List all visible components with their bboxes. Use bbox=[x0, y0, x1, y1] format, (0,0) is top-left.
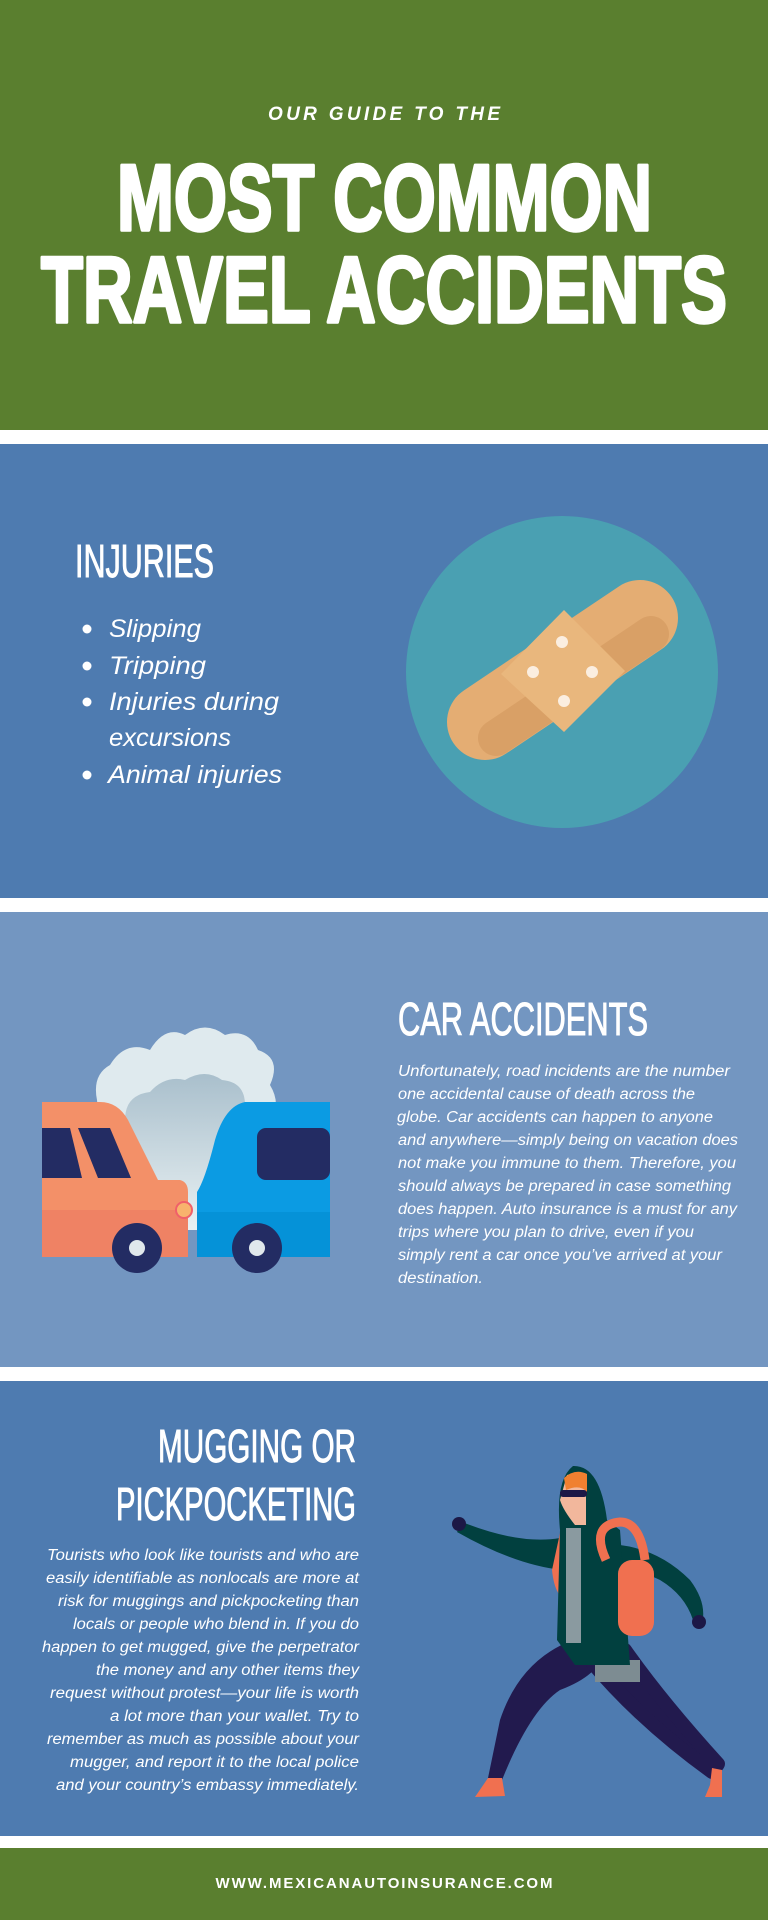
text block: mugging: easily identifiable as nonlocals are more at bbox=[46, 1570, 360, 1587]
heading: injuries: INJURIES bbox=[75, 535, 214, 587]
text block: car accidents: globe. Car accidents can happen to anyone bbox=[397, 1109, 713, 1126]
text block: car accidents: should always be prepared in case something bbox=[398, 1178, 731, 1195]
heading: mugging bbox=[116, 1420, 356, 1530]
text block: car accidents: does happen. Auto insurance is a must for any bbox=[398, 1201, 738, 1218]
text block: mugging: and your country’s embassy immediately. bbox=[56, 1777, 359, 1794]
text block: mugging: risk for muggings and pickpocketing than bbox=[58, 1593, 359, 1610]
text block: mugging: remember as much as possible about your bbox=[47, 1731, 360, 1748]
list: injuries: Injuries during bbox=[109, 688, 279, 716]
heading: mugging: PICKPOCKETING bbox=[116, 1478, 356, 1530]
subtitle: OUR GUIDE TO THE bbox=[268, 104, 501, 125]
text block: car accidents: and anywhere—simply being on vacation does bbox=[398, 1132, 738, 1149]
list: injuries: Tripping bbox=[109, 652, 206, 680]
text block: car accidents: simply rent a car once you’ve arrived at your bbox=[398, 1247, 723, 1264]
list: injuries bbox=[82, 615, 282, 789]
text block: mugging: locals or people who blend in. If you do bbox=[73, 1616, 359, 1633]
text block: car accidents: trips where you plan to drive, even if you bbox=[398, 1224, 694, 1241]
panel: car accidents bbox=[0, 912, 768, 1367]
text block: car accidents: not make you immune to them. Therefore, you bbox=[398, 1155, 736, 1172]
list: injuries: Animal injuries bbox=[106, 761, 282, 789]
text block: mugging: Tourists who look like tourists and who are bbox=[47, 1547, 359, 1564]
icon: car crash bbox=[42, 1028, 330, 1273]
list: injuries: Slipping bbox=[109, 615, 201, 643]
text block: car accidents: one accidental cause of death across the bbox=[398, 1086, 695, 1103]
text block: mugging: request without protest—your life is worth bbox=[50, 1685, 359, 1702]
text block: mugging bbox=[42, 1547, 360, 1794]
text block: mugging: mugger, and report it to the local police bbox=[70, 1754, 359, 1771]
text block: car accidents: destination. bbox=[398, 1270, 483, 1287]
footer bbox=[0, 1848, 768, 1920]
text block: car accidents bbox=[397, 1063, 738, 1287]
footer url: WWW.MEXICANAUTOINSURANCE.COM bbox=[216, 1875, 552, 1892]
icon: bandage bbox=[406, 516, 718, 828]
panel: mugging bbox=[0, 1381, 768, 1836]
text block: mugging: happen to get mugged, give the perpetrator bbox=[42, 1639, 360, 1656]
list: injuries: excursions bbox=[109, 724, 231, 752]
text block: car accidents: Unfortunately, road incidents are the number bbox=[398, 1063, 731, 1080]
header panel bbox=[0, 0, 768, 430]
heading: car accidents: CAR ACCIDENTS bbox=[398, 993, 648, 1045]
heading: mugging: MUGGING OR bbox=[158, 1420, 356, 1472]
panel: injuries bbox=[0, 444, 768, 898]
text block: mugging: a lot more than your wallet. Try to bbox=[110, 1708, 359, 1725]
icon: runner bbox=[452, 1466, 722, 1797]
title bbox=[41, 145, 727, 342]
text block: mugging: the money and any other items they bbox=[96, 1662, 360, 1679]
